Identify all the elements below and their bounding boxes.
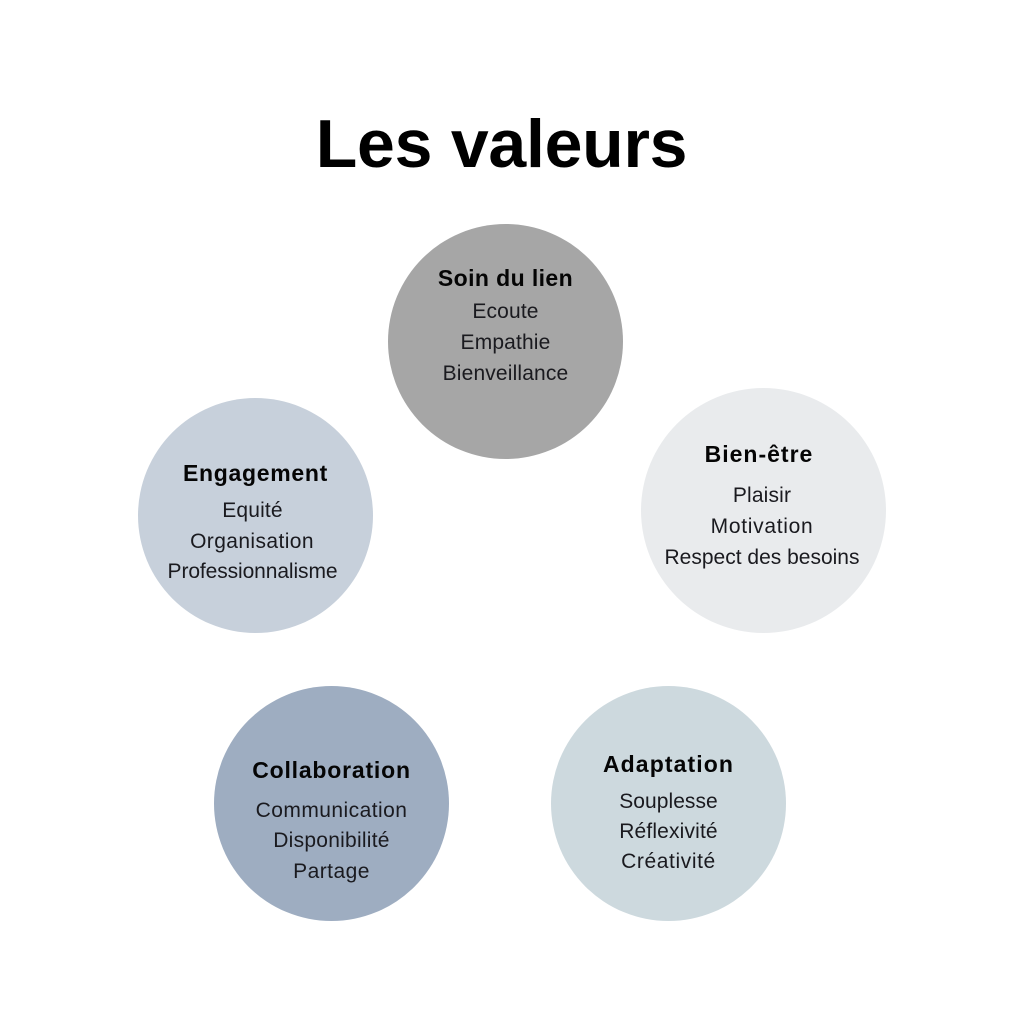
heading: Adaptation: Adaptation: [603, 751, 734, 777]
text: Empathie: Empathie: [461, 331, 550, 354]
circle: Soin du lien: [388, 224, 623, 459]
circle: Adaptation: [551, 686, 786, 921]
heading: Collaboration: Collaboration: [252, 757, 411, 783]
text: Partage: Partage: [293, 860, 370, 883]
circle: Engagement: [138, 398, 373, 633]
circle: Bien-être: [641, 388, 886, 633]
text: Bienveillance: Bienveillance: [443, 362, 568, 385]
text: Ecoute: Ecoute: [472, 300, 539, 323]
text: Organisation: Organisation: [190, 530, 314, 553]
heading: Soin du lien: Soin du lien: [438, 265, 573, 291]
text: Communication: Communication: [256, 799, 407, 822]
text: Créativité: Créativité: [621, 850, 716, 873]
text: Disponibilité: Disponibilité: [273, 829, 390, 852]
circle: Collaboration: [214, 686, 449, 921]
text: Professionnalisme: Professionnalisme: [168, 560, 337, 583]
text: Souplesse: Souplesse: [619, 790, 718, 813]
text: Respect des besoins: Respect des besoins: [665, 546, 859, 569]
text: Motivation: Motivation: [711, 515, 813, 538]
text: Plaisir: Plaisir: [733, 484, 791, 507]
text: Réflexivité: Réflexivité: [619, 820, 718, 843]
heading: Engagement: Engagement: [183, 460, 328, 486]
text: Equité: Equité: [222, 499, 283, 522]
title: Les valeurs: [316, 106, 687, 182]
heading: Bien-être: Bien-être: [705, 441, 813, 467]
